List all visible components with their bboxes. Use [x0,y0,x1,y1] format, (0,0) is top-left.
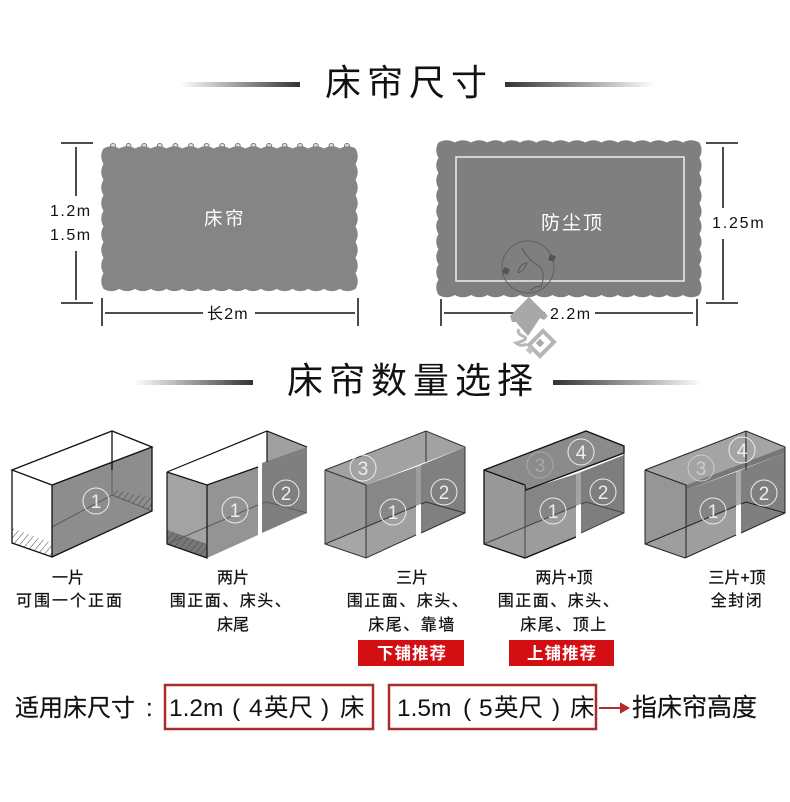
icon: watermark logo [502,241,556,356]
size box 1.2m: 英尺 [264,694,313,722]
row label: 适用床尺寸 [15,695,135,722]
height dimension [706,143,765,303]
caption 1: 可围一个正面 [16,592,124,610]
caption 2: 床尾 [217,616,249,634]
inner outline [456,157,684,281]
size box 1.2m: ( [232,695,241,722]
box diagram 2: 1 [230,501,240,522]
heading: bed curtain size: 床帘尺寸 [325,62,493,103]
box diagram 4: 2 [598,483,608,504]
box diagram 1: 1 [91,492,101,513]
size box 1.2m: 床 [340,694,364,722]
panel: option five, three pieces plus top [645,431,785,610]
width dimension [441,299,697,326]
badge: lower bunk [358,640,464,666]
curtain label: 床帘 [204,208,246,229]
size box 1.2m: 4 [249,695,263,722]
size box 1.5m: 5 [479,695,493,722]
caption 5 [708,569,766,610]
panel: option one, one piece [12,431,152,610]
box diagram 4: 1 [548,502,558,523]
box diagram 1 [12,431,152,557]
height dimension: 1.5m [50,227,92,244]
caption 3: 围正面、床头、 [347,592,469,610]
caption 1: 一片 [52,569,84,587]
box diagram 4: 4 [576,443,587,464]
height note: 指床帘高度 [632,694,757,722]
badge: upper bunk: 上铺推荐 [527,643,597,663]
panel: curtain size diagram [50,143,358,326]
panel: option two, two pieces [167,431,307,634]
height dimension: 1.25m [712,215,765,232]
size box 1.5m: 英尺 [494,694,543,722]
panel: option four, two pieces plus top [484,431,624,666]
box diagram 2 [167,431,307,558]
applicable bed sizes row [15,685,757,729]
scalloped curtain [101,146,358,291]
caption 2 [170,569,292,634]
box diagram 3: 2 [439,483,449,504]
box diagram 4: 3 [535,456,545,477]
caption 2: 两片 [217,569,249,587]
size box 1.2m: ) [321,695,329,722]
caption 3 [347,569,469,634]
width dimension: 2.2m [550,306,592,323]
badge: lower bunk: 下铺推荐 [377,643,447,663]
scalloped dust top [436,140,702,297]
box diagram 3: 1 [388,503,398,524]
box diagram 5: 2 [759,484,769,505]
caption 4: 两片+顶 [535,569,593,587]
caption 1 [16,569,124,610]
box diagram 3 [325,431,465,558]
size box 1.5m: ) [552,695,560,722]
curtain rings [110,144,350,148]
box diagram 5 [645,431,785,558]
size box 1.2m [165,685,373,729]
box diagram 2: 2 [281,484,291,505]
panel: dust top size diagram [436,140,765,326]
caption 4: 围正面、床头、 [498,592,620,610]
caption 5: 全封闭 [711,592,763,610]
height dimension: 1.2m [50,203,92,220]
size box 1.5m [389,685,596,729]
arrow [599,704,628,712]
caption 4: 床尾、顶上 [520,616,608,634]
heading: quantity selection: 床帘数量选择 [287,360,539,401]
heading: quantity selection [135,360,703,401]
dust top label: 防尘顶 [541,212,604,234]
size box 1.5m: 床 [570,694,594,722]
size box 1.5m: 1.5m [397,695,451,722]
box diagram 4 [484,431,624,558]
badge: upper bunk [509,640,614,666]
size box 1.2m: 1.2m [169,695,223,722]
width dimension [102,298,358,326]
box diagram 5: 4 [737,441,748,462]
caption 3: 三片 [396,569,428,587]
size box 1.5m: ( [463,695,472,722]
width dimension: 长2m [207,305,249,323]
box diagram 5: 3 [696,459,706,480]
caption 5: 三片+顶 [708,569,766,587]
caption 2: 围正面、床头、 [170,592,292,610]
box diagram 3: 3 [358,459,368,480]
caption 4 [498,569,620,634]
row label: : [146,695,153,722]
heading: bed curtain size [180,62,655,103]
caption 3: 床尾、靠墙 [368,616,456,634]
box diagram 5: 1 [708,502,718,523]
height dimension [50,143,93,303]
panel: option three, three pieces [325,431,469,666]
